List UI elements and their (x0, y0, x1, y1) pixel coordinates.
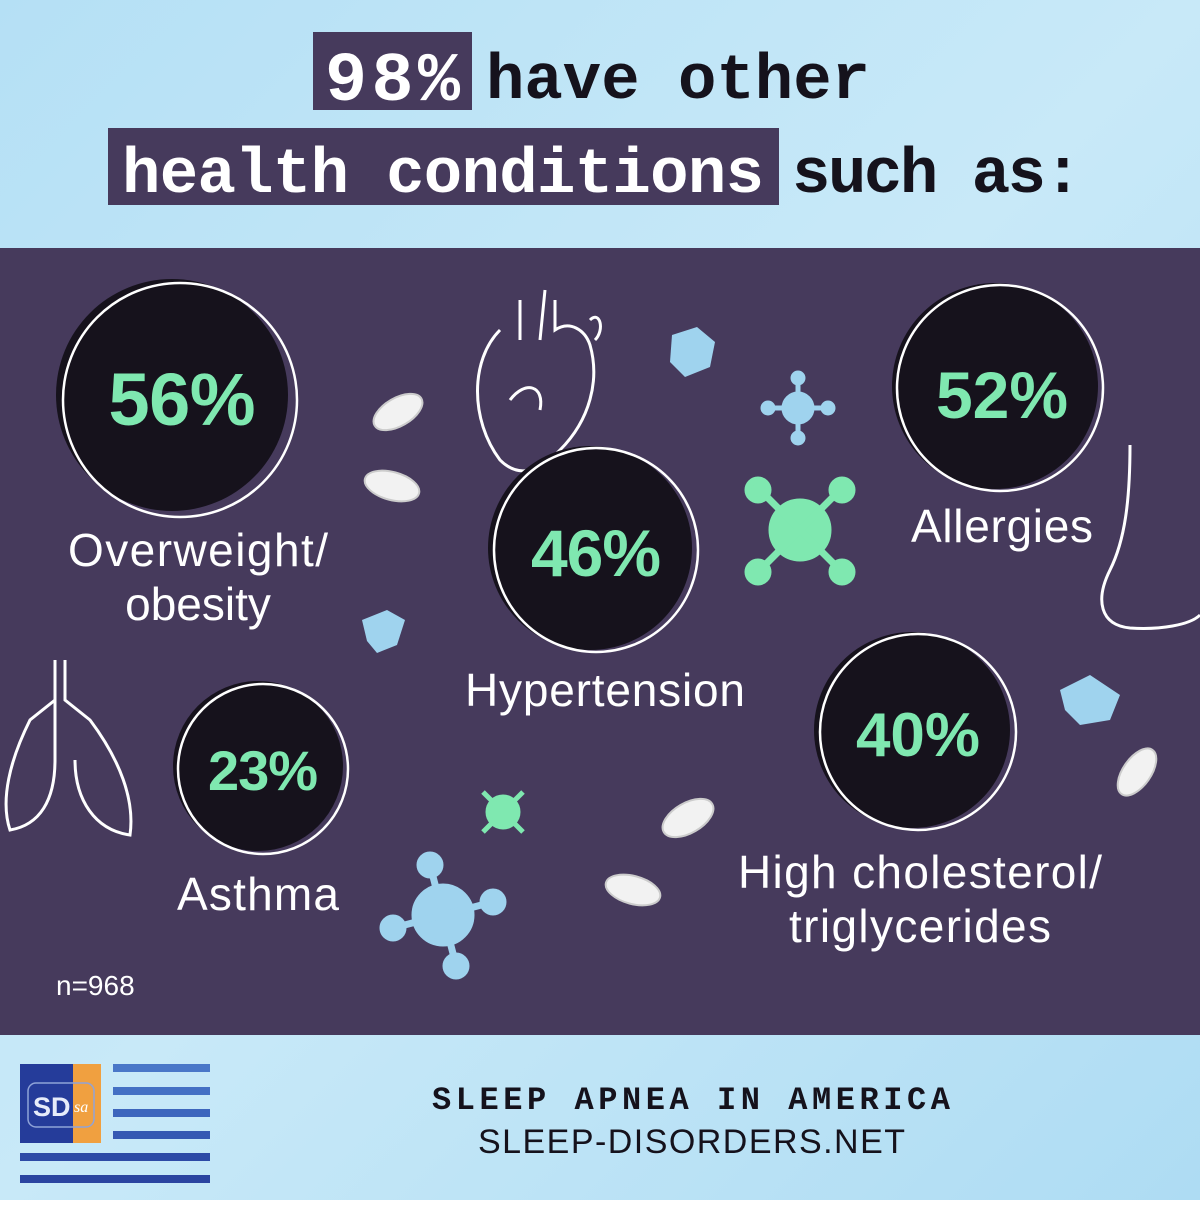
icon: heart outline (478, 290, 600, 471)
stat: 56%: obesity (125, 578, 271, 630)
logo: SD (33, 1092, 71, 1122)
panel: conditions (0, 248, 1200, 1035)
stat: 46% (465, 446, 745, 716)
icon: lungs outline (6, 660, 131, 835)
icon: pills (361, 386, 1164, 911)
stat: 40%: 40% (856, 701, 980, 770)
stat: 40% (738, 632, 1102, 952)
sample size note: n=968 (56, 970, 135, 1001)
stat: 23% (173, 681, 348, 920)
icon: blobs (362, 327, 1120, 725)
footer text (432, 1082, 951, 1161)
footer text: SLEEP APNEA IN AMERICA (432, 1082, 951, 1119)
stat: 52%: 52% (936, 358, 1068, 432)
icon: nose outline (1102, 445, 1200, 628)
stat: 56%: 56% (108, 358, 256, 441)
logo (20, 1064, 210, 1183)
stat: 52% (892, 283, 1103, 552)
title: 98% (325, 43, 461, 122)
stat: 52%: Allergies (911, 500, 1093, 552)
title (108, 32, 1082, 212)
stat: 46%: 46% (531, 516, 661, 590)
stat: 56%: Overweight/ (68, 524, 328, 576)
stat: 40%: High cholesterol/ (738, 846, 1102, 898)
footer text: SLEEP-DISORDERS.NET (478, 1123, 905, 1161)
title: have other (486, 46, 870, 118)
icon: viruses (383, 373, 852, 976)
stat: 56% (56, 279, 328, 630)
stat: 46%: Hypertension (465, 664, 745, 716)
stat: 40%: triglycerides (789, 900, 1051, 952)
stat: 23%: Asthma (177, 868, 339, 920)
stat: 23%: 23% (208, 739, 318, 802)
logo: sa (74, 1099, 88, 1116)
title: health conditions (122, 140, 764, 212)
title: such as: (792, 140, 1082, 212)
